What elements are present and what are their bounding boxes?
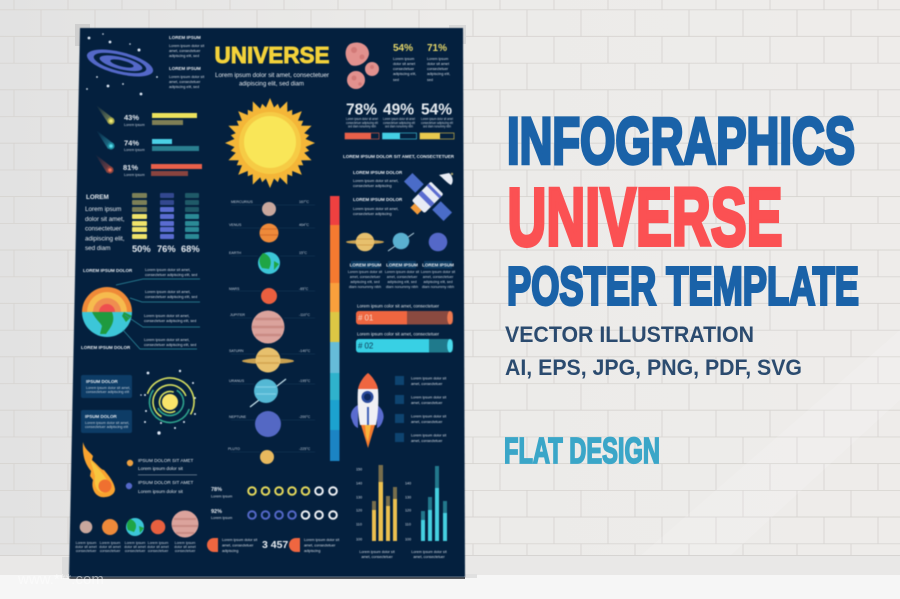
mercury: consectetuer xyxy=(76,549,97,553)
stats 54% 71% xyxy=(393,43,450,82)
stats 54% 71%: adipiscing elit, xyxy=(393,72,416,76)
asteroids xyxy=(346,42,379,89)
planet names: SATURN xyxy=(229,349,244,353)
satellite notes xyxy=(353,170,403,216)
blue note boxes: consectetuer adipiscing elit xyxy=(86,390,129,394)
text: lorem note: consectetuer xyxy=(85,226,121,232)
comet 74% xyxy=(96,130,199,152)
planet names xyxy=(228,200,253,451)
stat 49%: Lorem ipsum dolor sit amet xyxy=(383,117,415,121)
planet names: PLUTO xyxy=(228,447,240,451)
earth layers diagram: Lorem ipsum dolor sit amet, xyxy=(144,314,190,318)
bar 02: Lorem ipsum color sit amet, consectetuer xyxy=(357,332,439,338)
stat 54%: 54% xyxy=(421,102,452,118)
mars: Lorem ipsum xyxy=(148,541,168,545)
yellow bar chart xyxy=(356,465,397,559)
earth layers diagram xyxy=(81,268,200,350)
blue note boxes: IPSUM DOLOR xyxy=(86,379,119,384)
yellow bar chart: 130 xyxy=(356,496,362,500)
icon: venus xyxy=(260,224,278,242)
stat 54%: Lorem ipsum dolor sit amet xyxy=(421,117,453,121)
planet chip text: Lorem ipsum dolor sit xyxy=(385,270,419,274)
earth layers diagram: consectetuer adipiscing elit, sed xyxy=(145,273,197,277)
planet chips: LOREM IPSUM xyxy=(350,262,382,267)
icon: mars xyxy=(261,288,277,304)
planet chip text: adipiscing elit, sed xyxy=(387,280,417,284)
earth layers diagram: Lorem ipsum dolor sit amet, xyxy=(144,338,190,342)
icon: blue planet xyxy=(429,233,447,251)
earth: consectetuer xyxy=(125,549,146,553)
text: lorem note: Lorem ipsum xyxy=(85,206,121,213)
stats 54% 71%: consectetuer xyxy=(393,67,415,71)
planet names: URANUS xyxy=(229,379,245,383)
icon: satellite xyxy=(394,168,457,231)
text: galaxy notes: amet, consectetuer xyxy=(169,80,201,84)
small planets row xyxy=(75,510,198,553)
bar 01 xyxy=(356,304,453,324)
mars: dolor sit amet xyxy=(147,545,169,549)
planet chips: LOREM IPSUM xyxy=(422,262,454,267)
temperatures: -200°C xyxy=(299,415,311,419)
planet chip text: amet, consectetuer xyxy=(350,275,381,279)
comet 74%: 74% xyxy=(124,138,139,148)
counter with captions: Lorem ipsum dolor sit xyxy=(222,538,257,542)
blue note boxes: Lorem ipsum dolor sit amet, xyxy=(86,386,130,390)
text: galaxy notes: adipiscing elit, sed xyxy=(169,54,199,58)
planet chip text: diam nonummy nibh xyxy=(349,285,381,289)
yellow bar chart: 120 xyxy=(356,508,362,512)
icon: uranus xyxy=(250,379,286,407)
level column 68%: 68% xyxy=(181,244,200,254)
rocket checklist: Lorem ipsum dolor sit xyxy=(411,414,446,418)
earth xyxy=(124,518,146,553)
earth layers diagram: LOREM IPSUM DOLOR xyxy=(83,268,133,273)
comet 43%: 43% xyxy=(124,113,139,122)
planet chip text: diam nonummy nibh xyxy=(422,285,454,289)
rocket checklist: amet, consectetuer xyxy=(411,420,443,424)
stats 54% 71%: Lorem ipsum xyxy=(393,57,414,61)
icon: fireball comet xyxy=(83,442,115,497)
temperature bar xyxy=(330,196,340,461)
planet names: MERCURIUS xyxy=(231,200,253,204)
satellite notes: consectetuer adipiscing xyxy=(353,212,392,216)
mars xyxy=(147,520,169,553)
icon: pluto xyxy=(260,450,274,464)
mercury xyxy=(75,521,97,553)
earth layers diagram: consectetuer adipiscing elit, sed xyxy=(145,295,197,299)
planet chip text: Lorem ipsum dolor sit xyxy=(421,270,455,274)
temperatures: -65°C xyxy=(299,287,309,291)
stats 54% 71%: consectetuer xyxy=(427,67,449,71)
jupiter xyxy=(172,510,198,553)
legend list xyxy=(126,458,197,494)
bar 01: Lorem ipsum color sit amet, consectetuer xyxy=(357,304,439,310)
satellite notes: consectetuer adipiscing xyxy=(353,184,392,188)
stats 54% 71%: dolor sit amet xyxy=(427,62,449,66)
earth layers diagram: consectetuer adipiscing elit, sed xyxy=(144,319,196,323)
poster xyxy=(69,28,465,577)
temperatures: -225°C xyxy=(299,447,311,451)
planet names: NEPTUNE xyxy=(229,415,247,419)
text: galaxy notes xyxy=(169,35,204,89)
temperatures: -195°C xyxy=(299,379,311,383)
planets trio xyxy=(346,233,455,289)
mars: consectetuer xyxy=(148,549,169,553)
text: lorem note: LOREM xyxy=(86,194,109,201)
temperatures: -140°C xyxy=(299,349,311,353)
stats row with progress bars xyxy=(345,102,454,139)
counter with captions: amet, consectetuer xyxy=(304,544,336,548)
section heading: LOREM IPSUM DOLOR SIT AMET, CONSECTETUER xyxy=(343,154,455,159)
subtitle xyxy=(215,72,330,88)
jupiter: dolor sit amet xyxy=(174,545,196,549)
stats 54% 71%: 71% xyxy=(427,43,447,54)
planet chip text: Lorem ipsum dolor sit xyxy=(348,270,382,274)
stat 78%: 78% xyxy=(346,102,377,118)
icon: earth cross-section xyxy=(82,287,132,337)
blue note boxes: consectetuer adipiscing elit xyxy=(85,425,128,429)
satellite notes: LOREM IPSUM DOLOR xyxy=(353,197,403,202)
level column 76%: 76% xyxy=(157,244,176,254)
stat 49% xyxy=(382,102,416,139)
planet chip text: amet, consectetuer xyxy=(423,275,454,279)
poster mounting clips xyxy=(62,24,477,579)
yellow bar chart: 100 xyxy=(356,538,362,542)
text: lorem note xyxy=(85,194,125,252)
mercury: Lorem ipsum xyxy=(76,541,96,545)
counter with captions: Lorem ipsum dolor sit xyxy=(304,538,339,542)
cyan bar chart: 140 xyxy=(405,482,411,486)
stat 78%: Lorem ipsum dolor sit amet xyxy=(346,117,378,121)
bar 02 xyxy=(356,332,453,352)
icon: sun xyxy=(225,98,315,188)
rocket checklist xyxy=(395,376,446,443)
legend list: Lorem ipsum dolor sit xyxy=(138,489,184,494)
comet 81% xyxy=(95,154,202,177)
text: galaxy notes: adipiscing elit, sed xyxy=(169,85,199,89)
planet names: JUPITER xyxy=(230,313,245,317)
temperatures: 15°C xyxy=(299,251,307,255)
planet names: MARS xyxy=(229,287,240,291)
jupiter: consectetuer xyxy=(175,549,196,553)
icon: rocket xyxy=(351,373,384,448)
stats 54% 71%: sed xyxy=(393,78,399,82)
cyan bar chart: 100 xyxy=(405,538,411,542)
icon: ringed planet xyxy=(346,233,384,251)
stat 78% xyxy=(345,102,379,139)
stat 54%: consectetuer adipiscing elit xyxy=(421,121,453,125)
cyan bar chart: amet, consectetuer xyxy=(413,555,445,559)
icon: mercury xyxy=(262,202,276,216)
counter with captions: amet, consectetuer xyxy=(222,544,254,548)
rocket checklist: amet, consectetuer xyxy=(411,401,443,405)
text: galaxy notes: Lorem ipsum dolor sit xyxy=(169,44,204,48)
comet 81%: 81% xyxy=(123,163,138,172)
stat 49%: consectetuer adipiscing elit xyxy=(383,121,415,125)
venus: dolor sit amet xyxy=(99,545,121,549)
rocket checklist: Lorem ipsum dolor sit xyxy=(411,396,446,400)
stat 78%: sed diam nonummy nibh xyxy=(348,124,376,128)
earth layers diagram: consectetuer adipiscing elit, sed xyxy=(144,343,196,347)
comet 81%: Lorem ipsum xyxy=(124,173,145,177)
cyan bar chart: 120 xyxy=(405,508,411,512)
stats 54% 71%: Lorem ipsum xyxy=(427,57,448,61)
subtitle: Lorem ipsum dolor sit amet, consectetuer xyxy=(215,72,330,79)
satellite notes: Lorem ipsum dolor sit amet, xyxy=(353,207,398,211)
yellow bar chart: 150 xyxy=(356,468,362,472)
temperatures xyxy=(299,200,311,451)
bar 02: #02 xyxy=(358,342,374,351)
blue note boxes: IPSUM DOLOR xyxy=(85,414,118,419)
stats 54% 71%: adipiscing elit, xyxy=(427,72,450,76)
temperatures: -110°C xyxy=(299,313,310,317)
rocket checklist: Lorem ipsum dolor sit xyxy=(411,434,446,438)
text: galaxy notes: LOREM IPSUM xyxy=(169,66,201,71)
planet chip text: adipiscing elit, sed xyxy=(350,280,380,284)
stats 54% 71%: 54% xyxy=(393,43,413,54)
venus: Lorem ipsum xyxy=(100,541,120,545)
rocket checklist: Lorem ipsum dolor sit xyxy=(411,376,446,380)
planet chips: LOREM IPSUM xyxy=(386,262,418,267)
title: UNIVERSE xyxy=(214,42,330,68)
planet chip text: adipiscing elit, sed xyxy=(423,280,453,284)
text: galaxy notes: Lorem ipsum dolor sit xyxy=(169,75,204,79)
icon: jupiter xyxy=(252,310,284,344)
cyan bar chart: 110 xyxy=(405,522,411,526)
rocket checklist: amet, consectetuer xyxy=(411,382,443,386)
earth layers diagram: Lorem ipsum dolor sit amet, xyxy=(145,268,190,272)
counter with captions: 3 457 xyxy=(262,539,288,551)
venus: consectetuer xyxy=(100,549,121,553)
planet chip text xyxy=(348,270,455,289)
venus xyxy=(99,519,121,553)
galaxy icon with stars xyxy=(84,33,158,95)
text: lorem note: sed diam xyxy=(85,245,111,252)
legend list: IPSUM DOLOR SIT AMET xyxy=(138,480,194,485)
planet names: VENUS xyxy=(229,223,242,227)
stat 54%: sed diam nonummy nibh xyxy=(423,124,451,128)
cyan bar chart: Lorem ipsum dolor sit xyxy=(411,550,447,554)
comet 74%: Lorem ipsum xyxy=(124,148,145,152)
icon: spiral galaxy xyxy=(139,370,201,435)
temperatures: 167°C xyxy=(299,200,309,204)
ring progress rows: 92% xyxy=(211,509,222,515)
icon: saturn xyxy=(242,348,294,372)
cyan bar chart: 130 xyxy=(405,496,411,500)
planet names: EARTH xyxy=(229,251,242,255)
planet scale xyxy=(228,196,340,464)
flat design label: FLAT DESIGN xyxy=(504,430,660,471)
yellow bar chart: amet, consectetuer xyxy=(361,555,393,559)
stat 49%: sed diam nonummy nibh xyxy=(385,124,413,128)
stacked level chart xyxy=(85,193,200,254)
icon: ice planet xyxy=(388,233,414,251)
rocket checklist: amet, consectetuer xyxy=(411,439,443,443)
comet progress bars xyxy=(95,105,202,177)
bar 01: #01 xyxy=(358,314,374,323)
earth layers diagram: LOREM IPSUM DOLOR xyxy=(81,345,131,350)
comet 43%: Lorem ipsum xyxy=(124,123,145,127)
icon: neptune xyxy=(255,411,281,437)
counter with captions: adipiscing xyxy=(304,549,320,553)
yellow bar chart: 110 xyxy=(356,522,362,526)
yellow bar chart: 140 xyxy=(356,482,362,486)
text: galaxy notes: LOREM IPSUM xyxy=(169,35,201,40)
main headline xyxy=(507,104,859,316)
ring progress rows: 78% xyxy=(211,487,222,493)
watermark: www.***.com xyxy=(17,571,104,588)
ring progress rows: Lorem ipsum xyxy=(211,516,232,520)
subheading: vector illustration: VECTOR ILLUSTRATION xyxy=(505,322,754,347)
ring progress rows: Lorem ipsum xyxy=(211,494,232,498)
cylinder bars xyxy=(356,304,453,352)
stats 54% 71%: sed xyxy=(427,78,433,82)
mercury: dolor sit amet xyxy=(75,545,97,549)
jupiter: Lorem ipsum xyxy=(175,541,195,545)
earth: Lorem ipsum xyxy=(125,541,145,545)
earth: dolor sit amet xyxy=(124,545,146,549)
stat 54% xyxy=(420,102,454,139)
text: lorem note: dolor sit amet, xyxy=(85,216,125,223)
stats 54% 71%: dolor sit amet xyxy=(393,62,415,66)
blue note boxes: Lorem ipsum dolor sit amet, xyxy=(85,421,129,425)
level column 50%: 50% xyxy=(132,244,151,254)
legend list: Lorem ipsum dolor sit xyxy=(138,466,184,471)
satellite notes: Lorem ipsum dolor sit amet, xyxy=(353,179,398,183)
text: galaxy notes: amet, consectetuer xyxy=(169,49,201,53)
blue note boxes xyxy=(81,375,132,433)
stat 49%: 49% xyxy=(383,102,414,118)
icon: earth xyxy=(258,252,280,274)
yellow bar chart: Lorem ipsum dolor sit xyxy=(359,550,395,554)
subtitle: adipiscing elit, sed diam xyxy=(239,80,304,88)
planet chips xyxy=(350,261,454,268)
planet chip text: amet, consectetuer xyxy=(387,275,418,279)
comet 43% xyxy=(96,105,197,127)
counter with captions: adipiscing xyxy=(222,549,238,553)
temperatures: 464°C xyxy=(299,223,309,227)
cyan bar chart xyxy=(405,466,447,559)
planet chip text: diam nonummy nibh xyxy=(386,285,418,289)
text: lorem note: adipiscing elit, xyxy=(85,236,125,242)
counter with captions xyxy=(207,538,339,553)
planet guide lines xyxy=(231,205,315,452)
subheading: file formats: AI, EPS, JPG, PNG, PDF, SVG xyxy=(505,355,802,380)
earth layers diagram: Lorem ipsum dolor sit amet, xyxy=(145,290,190,294)
ring progress rows xyxy=(211,487,337,520)
stat 78%: consectetuer adipiscing elit xyxy=(346,121,378,125)
satellite notes: LOREM IPSUM DOLOR xyxy=(353,170,403,175)
legend list: IPSUM DOLOR SIT AMET xyxy=(138,458,194,463)
